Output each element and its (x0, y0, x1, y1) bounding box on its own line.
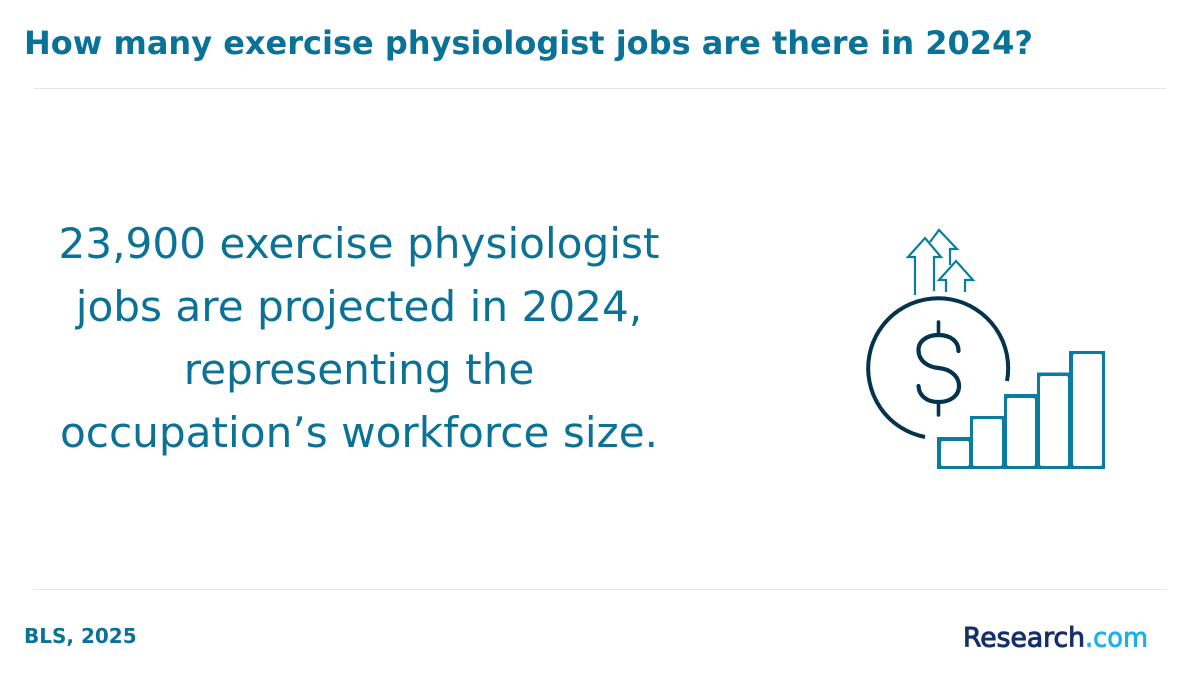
main statement text: jobs are projected in 2024, (76, 282, 642, 331)
source note: BLS, 2025 (24, 624, 137, 648)
logo wordmark: Research: Research (963, 622, 1085, 654)
main statement text (58, 219, 660, 457)
icon: rising arrows (908, 230, 973, 295)
icon: coin with dollar sign (868, 298, 1008, 437)
logo: Research.com (963, 622, 1148, 654)
main statement text: occupation’s workforce size. (60, 408, 658, 457)
bar chart (937, 351, 1105, 469)
logo wordmark: .com: .com (1085, 622, 1148, 654)
icon: dollar coin with rising arrows and bar chart (866, 228, 1105, 469)
main statement text: representing the (184, 345, 534, 394)
main statement text: 23,900 exercise physiologist (58, 219, 660, 268)
title: How many exercise physiologist jobs are there in 2024? (24, 24, 1033, 62)
